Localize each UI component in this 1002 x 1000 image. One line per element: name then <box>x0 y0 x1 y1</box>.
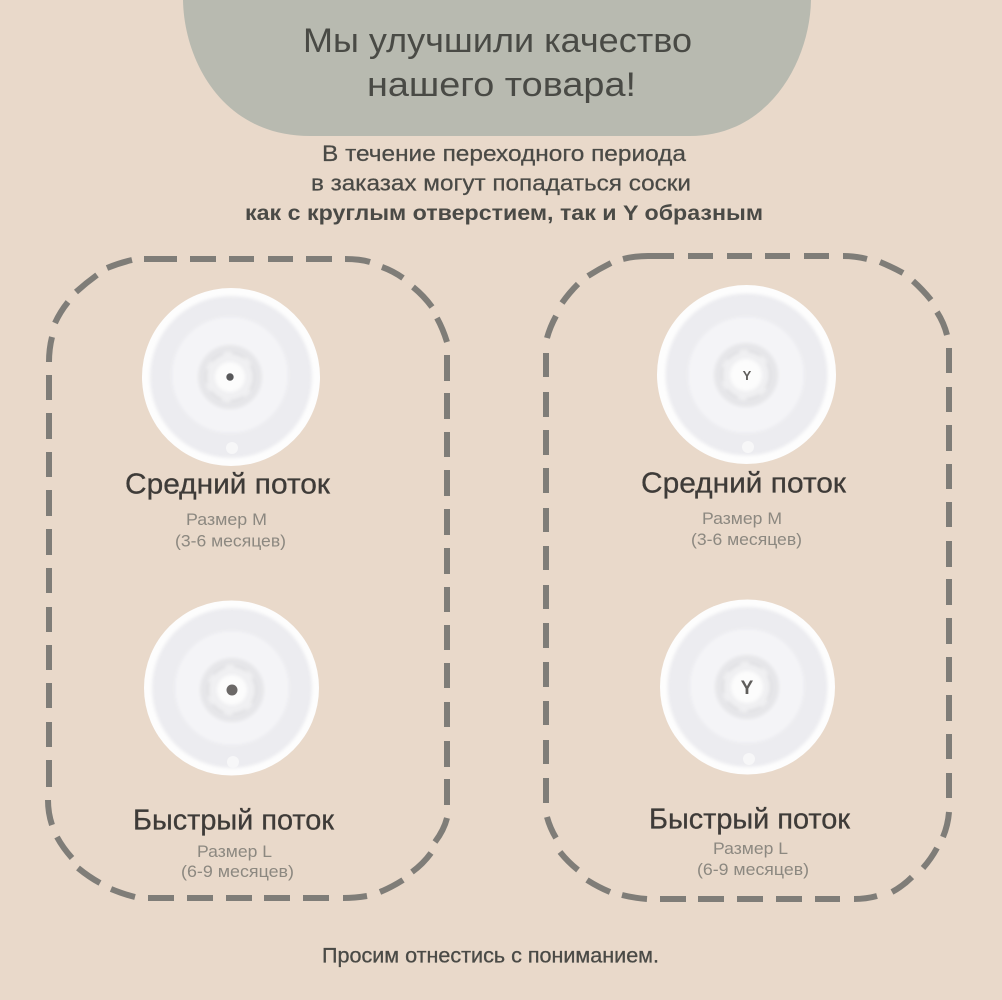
caption: size M <box>691 509 802 549</box>
dashed frame left <box>48 259 447 898</box>
footer note: Просим отнестись с пониманием. <box>322 944 659 968</box>
panel: round hole nipples <box>48 259 447 898</box>
dashed frame right <box>546 256 949 899</box>
caption: size M: (3-6 месяцев) <box>175 532 286 550</box>
caption: size L: (6-9 месяцев) <box>697 860 809 879</box>
intro text: В течение переходного периода <box>322 141 687 166</box>
title: нашего товара! <box>367 66 636 104</box>
intro text <box>245 141 763 225</box>
heading: fast flow: Быстрый поток <box>649 804 850 836</box>
caption: size M: Размер М <box>702 509 782 528</box>
disc: medium flow round hole <box>142 288 320 466</box>
heading: medium flow: Средний поток <box>641 468 846 500</box>
heading: fast flow: Быстрый поток <box>133 804 334 836</box>
caption: size L: Размер L <box>713 839 788 858</box>
title <box>303 22 692 104</box>
title: Мы улучшили качество <box>303 22 692 60</box>
intro text: как с круглым отверстием, так и Y образным <box>245 201 763 225</box>
caption: size L <box>697 839 809 879</box>
caption: size L: (6-9 месяцев) <box>181 862 294 881</box>
panel: Y-shaped nipples <box>546 256 949 899</box>
disc: medium flow Y hole <box>657 285 836 464</box>
caption: size M: Размер М <box>186 510 267 529</box>
caption: size L <box>181 842 294 881</box>
intro text: в заказах могут попадаться соски <box>311 170 691 196</box>
caption: size M <box>175 510 286 550</box>
disc: medium flow Y hole: Y <box>743 368 752 383</box>
disc: fast flow round hole <box>144 600 319 776</box>
disc: fast flow Y hole <box>660 600 835 774</box>
caption: size M: (3-6 месяцев) <box>691 530 802 549</box>
caption: size L: Размер L <box>197 842 272 861</box>
header panel <box>183 0 811 136</box>
disc: fast flow Y hole: Y <box>741 678 754 699</box>
heading: medium flow: Средний поток <box>125 468 330 500</box>
